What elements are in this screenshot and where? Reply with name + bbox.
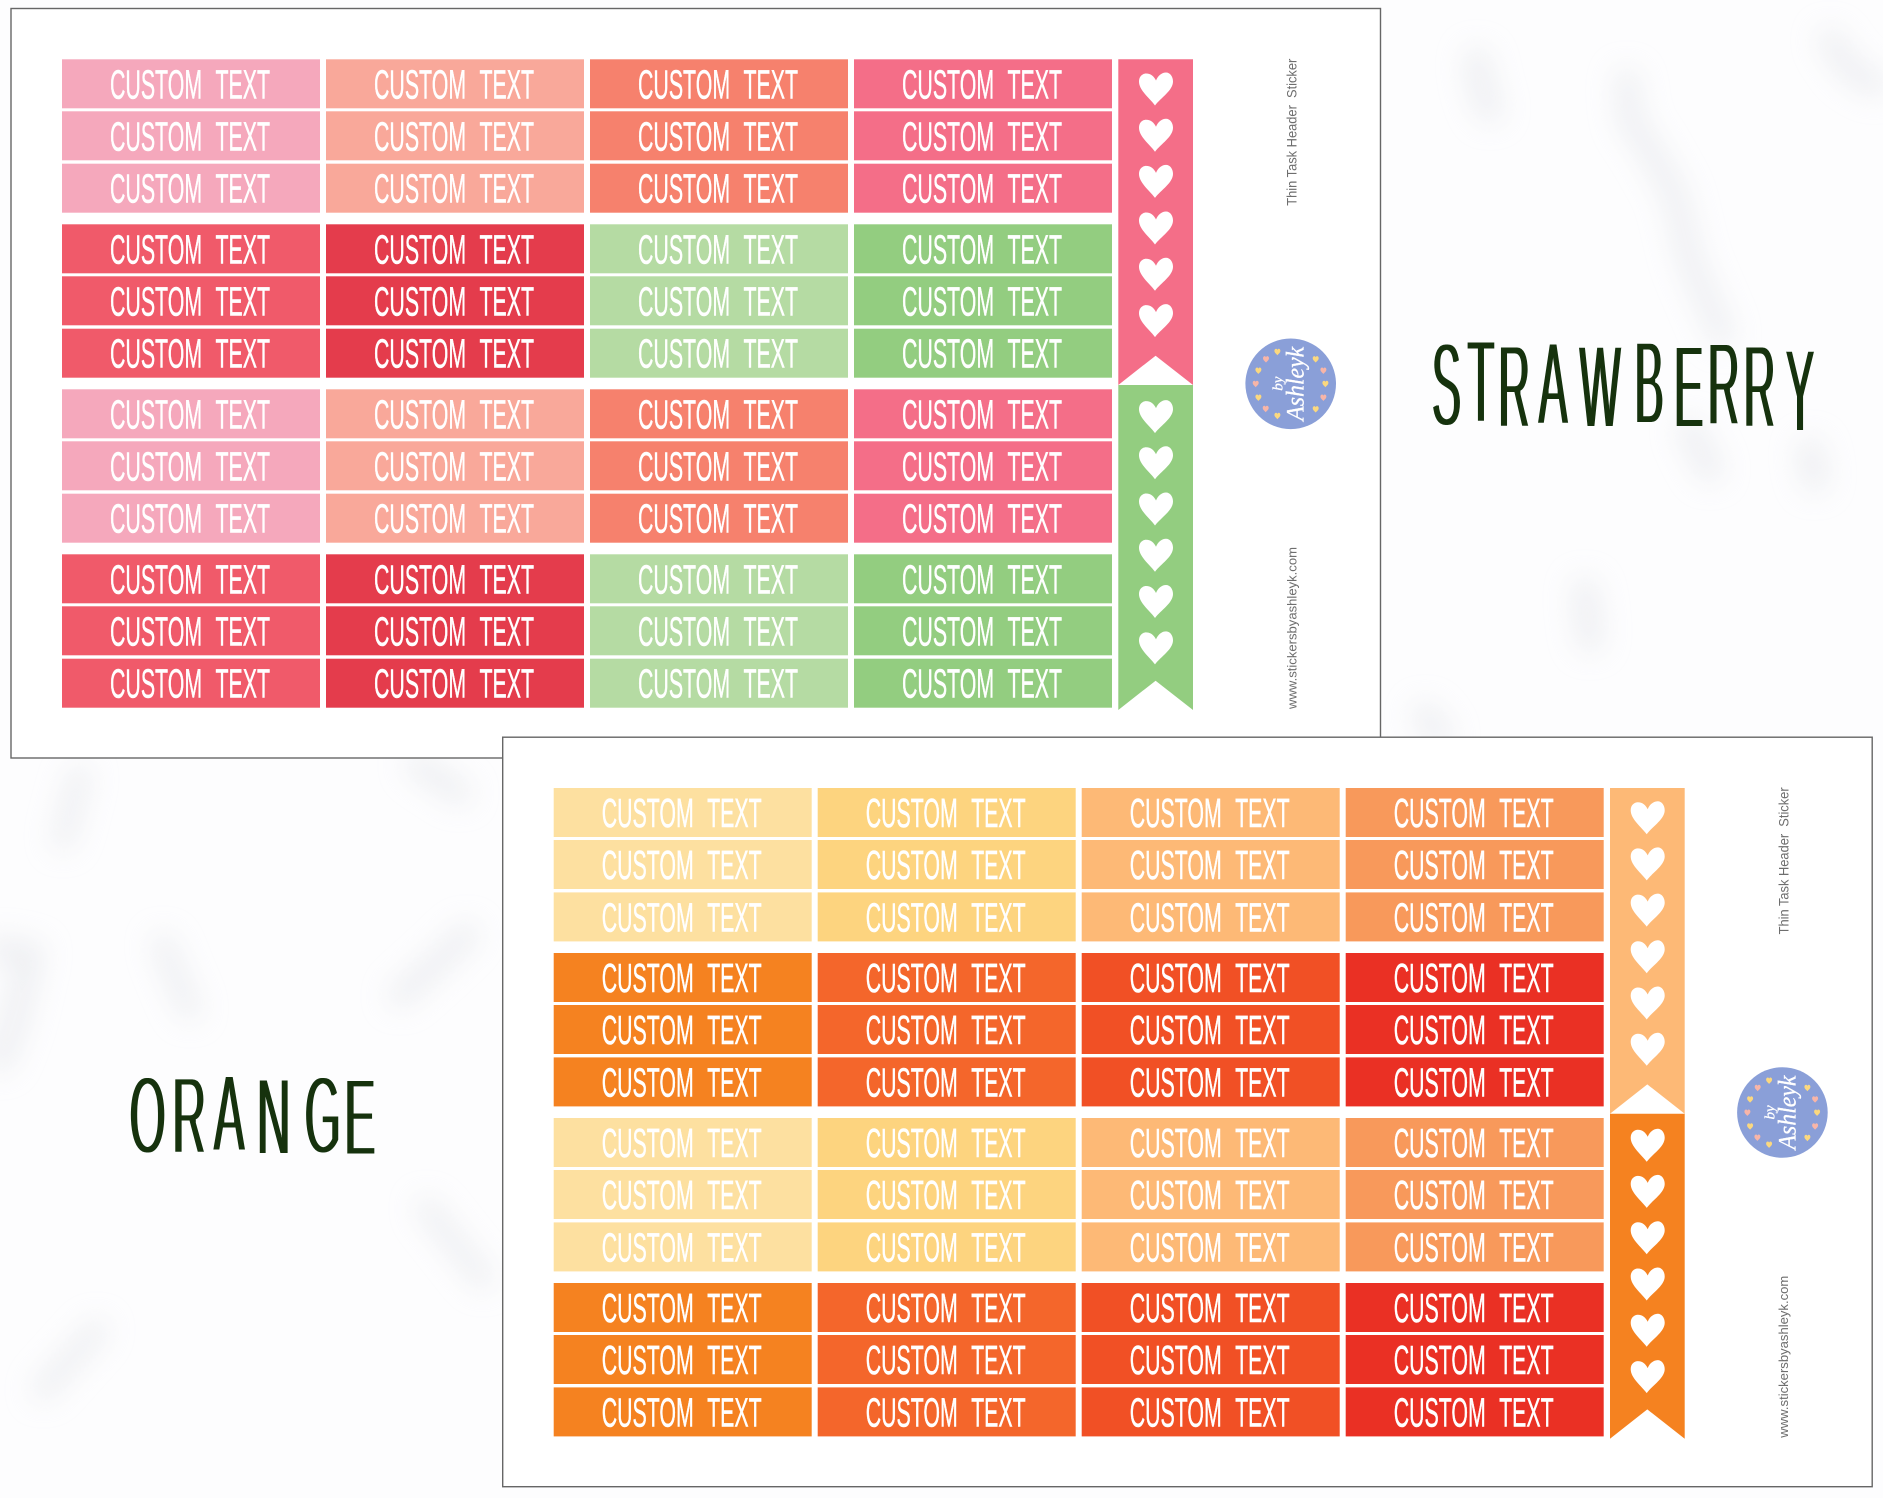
sticker label xyxy=(590,164,848,213)
sticker label xyxy=(554,892,812,941)
sticker label xyxy=(62,606,320,655)
sticker label: CUSTOM TEXT xyxy=(110,61,270,107)
sticker block: red column 1 group 4 xyxy=(62,554,320,708)
sticker label xyxy=(62,276,320,325)
sticker label: CUSTOM TEXT xyxy=(602,1007,762,1053)
sticker label: CUSTOM TEXT xyxy=(602,955,762,1001)
sticker label: CUSTOM TEXT xyxy=(866,955,1026,1001)
sticker label xyxy=(1082,1222,1340,1271)
sticker label: CUSTOM TEXT xyxy=(1130,842,1290,888)
sticker label: CUSTOM TEXT xyxy=(110,113,270,159)
sticker label xyxy=(854,59,1112,108)
sticker block: yellow column 2 group 1 xyxy=(818,788,1076,941)
sticker block: rose column 4 group 1 xyxy=(854,59,1112,213)
sticker label xyxy=(854,111,1112,160)
sticker label xyxy=(590,554,848,603)
sticker label xyxy=(854,441,1112,490)
icon: heart xyxy=(1139,304,1173,337)
sticker label: CUSTOM TEXT xyxy=(1130,790,1290,836)
sticker label: CUSTOM TEXT xyxy=(866,1389,1026,1435)
sticker label: CUSTOM TEXT xyxy=(866,842,1026,888)
sticker label xyxy=(326,389,584,438)
sticker label xyxy=(590,441,848,490)
sticker label: CUSTOM TEXT xyxy=(638,556,798,602)
sticker label: CUSTOM TEXT xyxy=(110,443,270,489)
sticker block: orange column 1 group 2 xyxy=(554,953,812,1106)
logo badge: Ashleyk xyxy=(1774,1075,1801,1151)
sticker label xyxy=(554,1005,812,1054)
sticker label xyxy=(326,164,584,213)
sticker block: soft orange column 4 group 1 xyxy=(1346,788,1604,941)
logo badge: by xyxy=(1271,376,1287,391)
sticker label xyxy=(1346,1170,1604,1219)
sticker label: CUSTOM TEXT xyxy=(902,226,1062,272)
sticker label: CUSTOM TEXT xyxy=(1130,1059,1290,1105)
sticker label xyxy=(554,1118,812,1167)
sticker label: CUSTOM TEXT xyxy=(374,113,534,159)
sticker label: CUSTOM TEXT xyxy=(1394,1007,1554,1053)
sticker label: CUSTOM TEXT xyxy=(602,1224,762,1270)
sticker label: CUSTOM TEXT xyxy=(866,1172,1026,1218)
sticker label: CUSTOM TEXT xyxy=(602,1389,762,1435)
sticker label: CUSTOM TEXT xyxy=(602,1337,762,1383)
sticker label: CUSTOM TEXT xyxy=(638,226,798,272)
sticker label: CUSTOM TEXT xyxy=(110,278,270,324)
sticker label xyxy=(326,659,584,708)
sticker label xyxy=(1346,953,1604,1002)
sticker label: CUSTOM TEXT xyxy=(866,1120,1026,1166)
sticker label: CUSTOM TEXT xyxy=(866,1224,1026,1270)
sticker label: CUSTOM TEXT xyxy=(638,496,798,542)
sticker label: CUSTOM TEXT xyxy=(1394,1389,1554,1435)
sticker label: CUSTOM TEXT xyxy=(1394,1172,1554,1218)
sticker label xyxy=(1082,788,1340,837)
sticker block: red orange column 3 group 4 xyxy=(1082,1283,1340,1436)
sticker label: CUSTOM TEXT xyxy=(374,661,534,707)
sticker label: CUSTOM TEXT xyxy=(1130,894,1290,940)
sticker label xyxy=(554,1387,812,1436)
sticker label xyxy=(62,554,320,603)
sticker label xyxy=(554,840,812,889)
sticker label xyxy=(326,554,584,603)
sticker label xyxy=(62,659,320,708)
sticker label: CUSTOM TEXT xyxy=(902,278,1062,324)
sticker label xyxy=(1346,1283,1604,1332)
sticker label: CUSTOM TEXT xyxy=(374,278,534,324)
sticker label xyxy=(1346,1335,1604,1384)
sticker label xyxy=(818,1057,1076,1106)
sticker label xyxy=(590,659,848,708)
sticker label xyxy=(554,1170,812,1219)
icon: heart xyxy=(1631,1129,1665,1162)
sticker label: CUSTOM TEXT xyxy=(374,556,534,602)
sticker block: pink column 1 group 3 xyxy=(62,389,320,543)
logo badge: by xyxy=(1762,1105,1778,1120)
sticker label: CUSTOM TEXT xyxy=(902,391,1062,437)
logo badge: Ashleyk xyxy=(1283,346,1310,423)
sticker label xyxy=(590,111,848,160)
sticker label: CUSTOM TEXT xyxy=(1394,1224,1554,1270)
sticker label xyxy=(818,1335,1076,1384)
sticker label: CUSTOM TEXT xyxy=(1130,1389,1290,1435)
website text: www.stickersbyashleyk.com xyxy=(1284,547,1299,710)
sticker label xyxy=(326,111,584,160)
sticker block: light orange column 3 group 1 xyxy=(1082,788,1340,941)
sticker label xyxy=(326,494,584,543)
sticker label: CUSTOM TEXT xyxy=(374,226,534,272)
sticker label: CUSTOM TEXT xyxy=(374,608,534,654)
sticker block: dark orange column 2 group 2 xyxy=(818,953,1076,1106)
sticker label: CUSTOM TEXT xyxy=(1394,790,1554,836)
sticker label: CUSTOM TEXT xyxy=(638,391,798,437)
sticker label: CUSTOM TEXT xyxy=(1130,1224,1290,1270)
sticker label xyxy=(1082,1170,1340,1219)
sticker label xyxy=(62,59,320,108)
sticker label xyxy=(854,329,1112,378)
sticker block: dark orange column 2 group 4 xyxy=(818,1283,1076,1436)
sticker label: CUSTOM TEXT xyxy=(374,496,534,542)
sticker label: CUSTOM TEXT xyxy=(110,226,270,272)
sticker label: CUSTOM TEXT xyxy=(110,496,270,542)
icon: heart xyxy=(1139,492,1173,526)
sticker label xyxy=(1082,953,1340,1002)
sticker label xyxy=(1346,1118,1604,1167)
sticker block: soft orange column 4 group 3 xyxy=(1346,1118,1604,1271)
sticker label xyxy=(554,1335,812,1384)
sticker label xyxy=(62,494,320,543)
sticker label xyxy=(818,1170,1076,1219)
sticker block: orange column 1 group 4 xyxy=(554,1283,812,1436)
sticker block: salmon column 2 group 3 xyxy=(326,389,584,543)
ribbon: light orange with hearts xyxy=(1610,788,1685,1114)
icon: heart xyxy=(1631,986,1665,1020)
sticker label xyxy=(326,224,584,273)
sticker label: CUSTOM TEXT xyxy=(1130,1285,1290,1331)
sticker label: CUSTOM TEXT xyxy=(638,113,798,159)
sticker label xyxy=(818,840,1076,889)
sticker label: CUSTOM TEXT xyxy=(866,1285,1026,1331)
sticker label: CUSTOM TEXT xyxy=(638,608,798,654)
icon: heart xyxy=(1139,539,1173,572)
sticker label xyxy=(326,606,584,655)
sticker label: CUSTOM TEXT xyxy=(1394,955,1554,1001)
sticker label: CUSTOM TEXT xyxy=(602,1120,762,1166)
sticker label xyxy=(818,892,1076,941)
sticker label: CUSTOM TEXT xyxy=(902,443,1062,489)
sticker label: CUSTOM TEXT xyxy=(866,1059,1026,1105)
sticker label xyxy=(590,59,848,108)
sticker label xyxy=(854,659,1112,708)
sticker block: light green column 3 group 2 xyxy=(590,224,848,378)
sheet name text: Thin Task Header Sticker xyxy=(1775,787,1791,934)
sticker label xyxy=(854,606,1112,655)
sheet name text: Thin Task Header Sticker xyxy=(1284,58,1300,206)
logo badge xyxy=(1737,1067,1828,1158)
sticker label xyxy=(1082,1387,1340,1436)
sticker label: CUSTOM TEXT xyxy=(110,166,270,212)
sticker label: CUSTOM TEXT xyxy=(602,842,762,888)
icon: heart xyxy=(1631,1268,1665,1300)
sticker label xyxy=(326,276,584,325)
sticker label xyxy=(1082,1335,1340,1384)
ribbon: orange with hearts xyxy=(1610,1114,1685,1439)
icon: heart xyxy=(1139,631,1173,664)
icon: heart xyxy=(1631,1314,1665,1347)
sticker label: CUSTOM TEXT xyxy=(1130,1007,1290,1053)
sticker label: CUSTOM TEXT xyxy=(902,496,1062,542)
sticker label: CUSTOM TEXT xyxy=(866,1337,1026,1383)
icon: heart xyxy=(1631,894,1665,927)
sticker label: CUSTOM TEXT xyxy=(1394,1337,1554,1383)
sticker block: red column 4 group 2 xyxy=(1346,953,1604,1106)
icon: heart xyxy=(1631,1360,1665,1393)
sticker label xyxy=(554,1057,812,1106)
sticker label: CUSTOM TEXT xyxy=(902,331,1062,377)
sticker label xyxy=(854,389,1112,438)
sticker label: CUSTOM TEXT xyxy=(902,61,1062,107)
sticker label xyxy=(1346,1222,1604,1271)
icon: heart xyxy=(1631,801,1665,834)
sticker block: light orange column 3 group 3 xyxy=(1082,1118,1340,1271)
sticker label xyxy=(854,276,1112,325)
sticker label xyxy=(554,1222,812,1271)
sticker label: CUSTOM TEXT xyxy=(866,894,1026,940)
sticker block: salmon column 2 group 1 xyxy=(326,59,584,213)
sticker label xyxy=(62,441,320,490)
sticker label: CUSTOM TEXT xyxy=(1394,1285,1554,1331)
sticker block: pink column 1 group 1 xyxy=(62,59,320,213)
sticker block: deep red column 2 group 4 xyxy=(326,554,584,708)
sticker label xyxy=(818,953,1076,1002)
icon: heart xyxy=(1139,585,1173,618)
sticker label: CUSTOM TEXT xyxy=(638,661,798,707)
icon: heart xyxy=(1139,446,1173,479)
icon: heart xyxy=(1139,212,1173,244)
sticker label: CUSTOM TEXT xyxy=(110,608,270,654)
sticker label xyxy=(554,1283,812,1332)
sticker label: CUSTOM TEXT xyxy=(374,331,534,377)
sticker label xyxy=(326,441,584,490)
sticker label xyxy=(818,1222,1076,1271)
icon: heart xyxy=(1139,72,1173,106)
sticker label: CUSTOM TEXT xyxy=(602,1059,762,1105)
sticker label xyxy=(590,224,848,273)
sticker label xyxy=(854,224,1112,273)
icon: heart xyxy=(1139,119,1173,152)
sticker label: CUSTOM TEXT xyxy=(110,331,270,377)
sticker label: CUSTOM TEXT xyxy=(110,391,270,437)
sticker block: coral column 3 group 3 xyxy=(590,389,848,543)
sticker label xyxy=(1082,840,1340,889)
title: orange: ORANGE xyxy=(130,1052,375,1178)
sticker block: red column 4 group 4 xyxy=(1346,1283,1604,1436)
sticker label xyxy=(1082,1005,1340,1054)
sticker label: CUSTOM TEXT xyxy=(1130,955,1290,1001)
sticker label: CUSTOM TEXT xyxy=(602,894,762,940)
sticker block: red column 1 group 2 xyxy=(62,224,320,378)
icon: heart xyxy=(1631,1033,1665,1066)
sticker label xyxy=(590,494,848,543)
sticker label: CUSTOM TEXT xyxy=(902,661,1062,707)
sticker label xyxy=(854,164,1112,213)
sticker label xyxy=(818,1283,1076,1332)
sticker label xyxy=(1346,1057,1604,1106)
sticker label: CUSTOM TEXT xyxy=(602,1285,762,1331)
sticker label xyxy=(1082,892,1340,941)
sticker block: deep red column 2 group 2 xyxy=(326,224,584,378)
sticker label: CUSTOM TEXT xyxy=(638,443,798,489)
sticker label: CUSTOM TEXT xyxy=(902,556,1062,602)
sticker label xyxy=(1346,1005,1604,1054)
sticker label xyxy=(1082,1283,1340,1332)
sticker label: CUSTOM TEXT xyxy=(110,556,270,602)
sticker label xyxy=(854,554,1112,603)
sticker label xyxy=(1346,840,1604,889)
sticker label: CUSTOM TEXT xyxy=(902,166,1062,212)
sticker label: CUSTOM TEXT xyxy=(1130,1172,1290,1218)
sticker label: CUSTOM TEXT xyxy=(638,331,798,377)
sticker label xyxy=(62,111,320,160)
sticker label xyxy=(62,389,320,438)
sticker label: CUSTOM TEXT xyxy=(902,113,1062,159)
sticker label xyxy=(1082,1118,1340,1167)
icon: heart xyxy=(1631,1221,1665,1254)
sticker label: CUSTOM TEXT xyxy=(1130,1337,1290,1383)
sticker label xyxy=(818,788,1076,837)
sticker label: CUSTOM TEXT xyxy=(374,443,534,489)
sticker label xyxy=(554,953,812,1002)
sticker label: CUSTOM TEXT xyxy=(638,61,798,107)
ribbon: rose with hearts xyxy=(1118,59,1193,385)
sticker label: CUSTOM TEXT xyxy=(866,1007,1026,1053)
sticker block: red orange column 3 group 2 xyxy=(1082,953,1340,1106)
sticker label xyxy=(326,329,584,378)
icon: heart xyxy=(1139,400,1173,433)
sticker label: CUSTOM TEXT xyxy=(638,166,798,212)
sticker block: pale yellow column 1 group 3 xyxy=(554,1118,812,1271)
sticker label xyxy=(818,1118,1076,1167)
sticker label xyxy=(1346,892,1604,941)
sticker label: CUSTOM TEXT xyxy=(602,1172,762,1218)
sticker label: CUSTOM TEXT xyxy=(866,790,1026,836)
icon: heart xyxy=(1631,940,1665,973)
sticker block: coral column 3 group 1 xyxy=(590,59,848,213)
sticker block: green column 4 group 4 xyxy=(854,554,1112,708)
sticker label: CUSTOM TEXT xyxy=(374,391,534,437)
icon: heart xyxy=(1139,165,1173,198)
sticker label: CUSTOM TEXT xyxy=(1130,1120,1290,1166)
sticker label xyxy=(818,1387,1076,1436)
title: strawberry: STRAWBERRY xyxy=(1432,314,1815,457)
sticker label xyxy=(1346,1387,1604,1436)
sticker label: CUSTOM TEXT xyxy=(902,608,1062,654)
sticker label xyxy=(1346,788,1604,837)
logo badge xyxy=(1245,338,1336,429)
sticker label xyxy=(818,1005,1076,1054)
website text: www.stickersbyashleyk.com xyxy=(1776,1276,1791,1439)
sticker block: pale yellow column 1 group 1 xyxy=(554,788,812,941)
sticker label: CUSTOM TEXT xyxy=(374,61,534,107)
sticker label: CUSTOM TEXT xyxy=(1394,894,1554,940)
sticker label: CUSTOM TEXT xyxy=(110,661,270,707)
sticker label: CUSTOM TEXT xyxy=(638,278,798,324)
sticker label: CUSTOM TEXT xyxy=(374,166,534,212)
sticker label xyxy=(590,329,848,378)
ribbon: green with hearts xyxy=(1118,385,1193,710)
sticker block: green column 4 group 2 xyxy=(854,224,1112,378)
sticker label xyxy=(854,494,1112,543)
panel: orange sticker sheet xyxy=(503,737,1872,1487)
sticker label xyxy=(62,329,320,378)
sticker label: CUSTOM TEXT xyxy=(1394,1059,1554,1105)
sticker block: light green column 3 group 4 xyxy=(590,554,848,708)
sticker label xyxy=(1082,1057,1340,1106)
sticker label: CUSTOM TEXT xyxy=(602,790,762,836)
sticker label: CUSTOM TEXT xyxy=(1394,842,1554,888)
sticker block: rose column 4 group 3 xyxy=(854,389,1112,543)
sticker label xyxy=(62,164,320,213)
sticker label: CUSTOM TEXT xyxy=(1394,1120,1554,1166)
sticker label xyxy=(590,276,848,325)
sticker label xyxy=(326,59,584,108)
sticker label xyxy=(62,224,320,273)
sticker block: yellow column 2 group 3 xyxy=(818,1118,1076,1271)
icon: heart xyxy=(1631,847,1665,880)
sticker label xyxy=(590,389,848,438)
sticker label xyxy=(554,788,812,837)
icon: heart xyxy=(1139,258,1173,291)
sticker label xyxy=(590,606,848,655)
panel: strawberry sticker sheet xyxy=(11,8,1380,758)
icon: heart xyxy=(1631,1175,1665,1208)
